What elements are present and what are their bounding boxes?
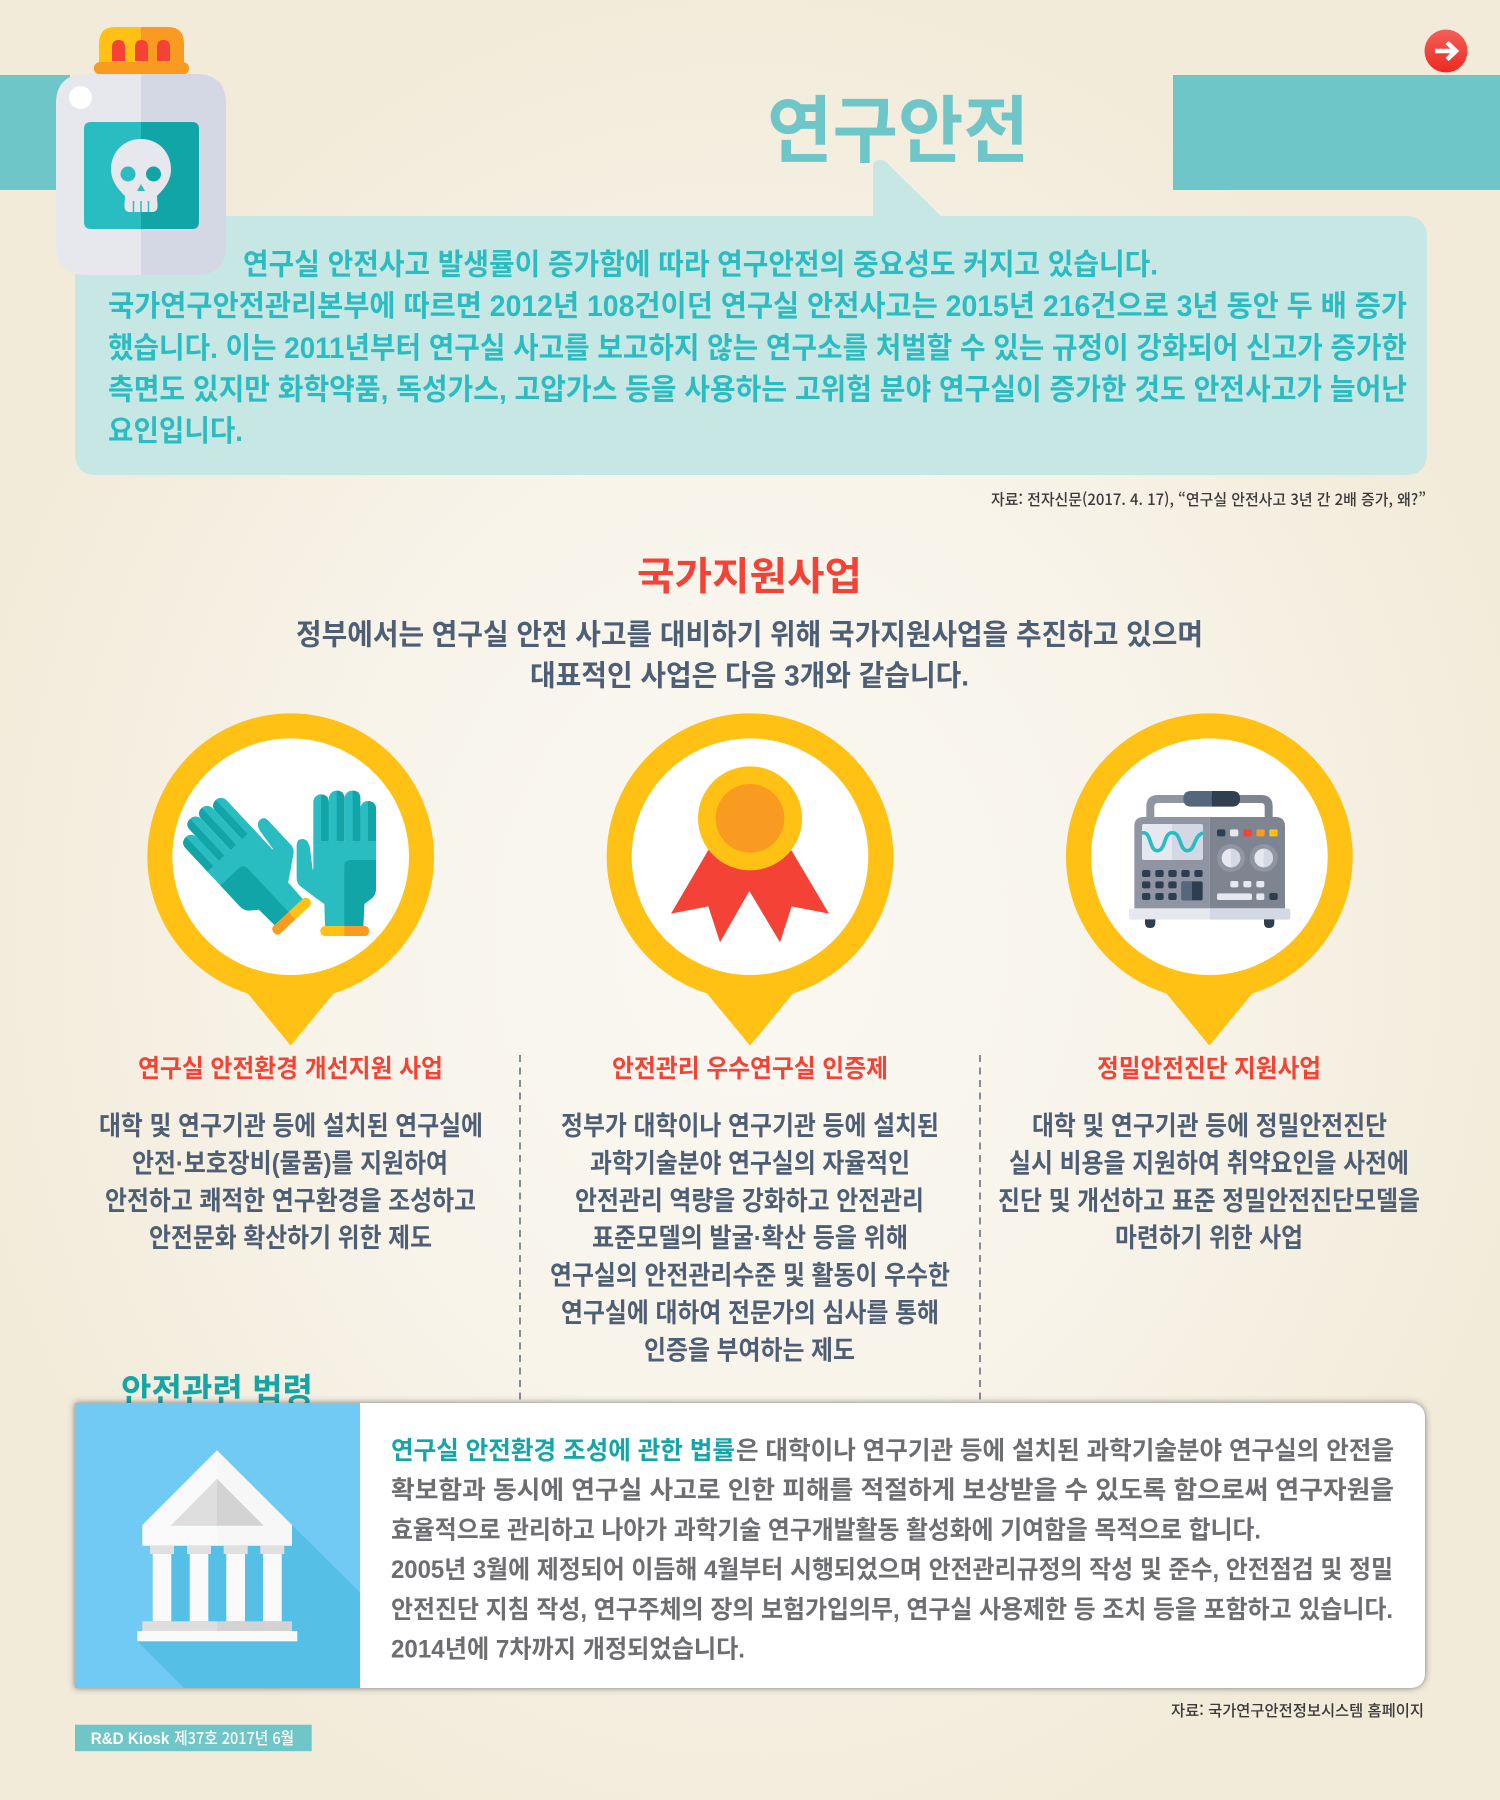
law description text — [391, 1437, 1394, 1664]
header band left — [0, 75, 70, 190]
column 3 body — [998, 1111, 1420, 1253]
column 2: safety lab certification — [550, 1055, 950, 1365]
source note: intro: 자료: 전자신문(2017. 4. 17), “연구실 안전사고 3년 간 2배 증가, 왜?” — [991, 488, 1426, 510]
column 2 body: 과학기술분야 연구실의 자율적인 — [590, 1148, 910, 1178]
law description text: 안전진단 지침 작성, 연구주체의 장의 보험가입의무, 연구실 사용제한 등 조치 등을 포함하고 있습니다. — [391, 1596, 1393, 1624]
column 3 body: 진단 및 개선하고 표준 정밀안전진단모델을 — [998, 1186, 1420, 1216]
column 2 body — [550, 1111, 950, 1365]
icon: next arrow — [1424, 30, 1468, 72]
column 3 body: 대학 및 연구기관 등에 정밀안전진단 — [1032, 1111, 1387, 1141]
pin icon: diagnostic device — [1066, 713, 1353, 1046]
panel: safety law — [75, 1403, 1425, 1688]
column 2 body: 인증을 부여하는 제도 — [644, 1335, 855, 1365]
column 2 body: 연구실에 대하여 전문가의 심사를 통해 — [561, 1298, 939, 1328]
law description text: 확보함과 동시에 연구실 사고로 인한 피해를 적절하게 보상받을 수 있도록 함으로써 연구자원을 — [391, 1477, 1394, 1505]
column 1 title: 연구실 안전환경 개선지원 사업 — [138, 1055, 443, 1083]
subheading text — [296, 618, 1203, 692]
column 1 body: 안전·보호장비(물품)를 지원하여 — [132, 1148, 448, 1178]
intro text: 국가연구안전관리본부에 따르면 2012년 108건이던 연구실 안전사고는 2015년 216건으로 3년 동안 두 배 증가 — [108, 290, 1407, 323]
column 1 body: 안전하고 쾌적한 연구환경을 조성하고 — [105, 1186, 476, 1216]
icon: courthouse — [75, 1403, 360, 1688]
intro text: 연구실 안전사고 발생률이 증가함에 따라 연구안전의 중요성도 커지고 있습니다. — [243, 248, 1158, 282]
column 3 title: 정밀안전진단 지원사업 — [1097, 1055, 1321, 1083]
glove left — [173, 781, 330, 941]
law description text: 은 대학이나 연구기관 등에 설치된 과학기술분야 연구실의 안전을 — [736, 1437, 1394, 1465]
column 2 body: 안전관리 역량을 강화하고 안전관리 — [575, 1186, 924, 1216]
law description text: 2014년에 7차까지 개정되었습니다. — [391, 1636, 745, 1664]
icon: poison bottle — [56, 27, 226, 275]
subheading text: 대표적인 사업은 다음 3개와 같습니다. — [530, 660, 969, 692]
title: 연구안전 — [767, 72, 1029, 178]
law description text: 2005년 3월에 제정되어 이듬해 4월부터 시행되었으며 안전관리규정의 작성 및 준수, 안전점검 및 정밀 — [391, 1556, 1393, 1584]
source note: law: 자료: 국가연구안전정보시스템 홈페이지 — [1171, 1699, 1424, 1721]
glove right — [297, 791, 376, 936]
column 2 body: 정부가 대학이나 연구기관 등에 설치된 — [561, 1111, 939, 1141]
column 2 body: 표준모델의 발굴·확산 등을 위해 — [592, 1223, 908, 1253]
law description text: 효율적으로 관리하고 나아가 과학기술 연구개발활동 활성화에 기여함을 목적으로 합니다. — [391, 1516, 1261, 1544]
intro text: 측면도 있지만 화학약품, 독성가스, 고압가스 등을 사용하는 고위험 분야 연구실이 증가한 것도 안전사고가 늘어난 — [108, 374, 1407, 406]
footer tag — [75, 1725, 312, 1751]
panel: intro speech bubble — [75, 160, 1427, 475]
column 3 body: 실시 비용을 지원하여 취약요인을 사전에 — [1009, 1148, 1409, 1178]
column 3: precision diagnosis program — [998, 1055, 1420, 1253]
column 1 body — [99, 1111, 483, 1253]
column 2 title: 안전관리 우수연구실 인증제 — [612, 1055, 888, 1083]
heading: national support programs: 국가지원사업 — [637, 546, 862, 602]
intro text — [108, 248, 1407, 448]
column 3 body: 마련하기 위한 사업 — [1115, 1223, 1303, 1253]
footer tag: R&D Kiosk — [91, 1729, 170, 1748]
law description text: 연구실 안전환경 조성에 관한 법률 — [391, 1437, 735, 1465]
header band right — [1173, 75, 1500, 190]
intro text: 요인입니다. — [108, 415, 243, 448]
footer tag: 제37호 2017년 6월 — [174, 1725, 294, 1749]
column 2 body: 연구실의 안전관리수준 및 활동이 우수한 — [550, 1261, 950, 1291]
subheading text: 정부에서는 연구실 안전 사고를 대비하기 위해 국가지원사업을 추진하고 있으며 — [296, 618, 1203, 652]
column 1 body: 대학 및 연구기관 등에 설치된 연구실에 — [99, 1111, 483, 1141]
column 1: environment support program — [99, 1055, 483, 1253]
pin icon: gloves — [147, 713, 434, 1046]
pin icon: medal — [607, 713, 893, 1046]
column 1 body: 안전문화 확산하기 위한 제도 — [149, 1223, 432, 1253]
heading: safety laws: 안전관련 법령 — [121, 1363, 313, 1415]
intro text: 했습니다. 이는 2011년부터 연구실 사고를 보고하지 않는 연구소를 처벌할 수 있는 규정이 강화되어 신고가 증가한 — [108, 332, 1407, 365]
